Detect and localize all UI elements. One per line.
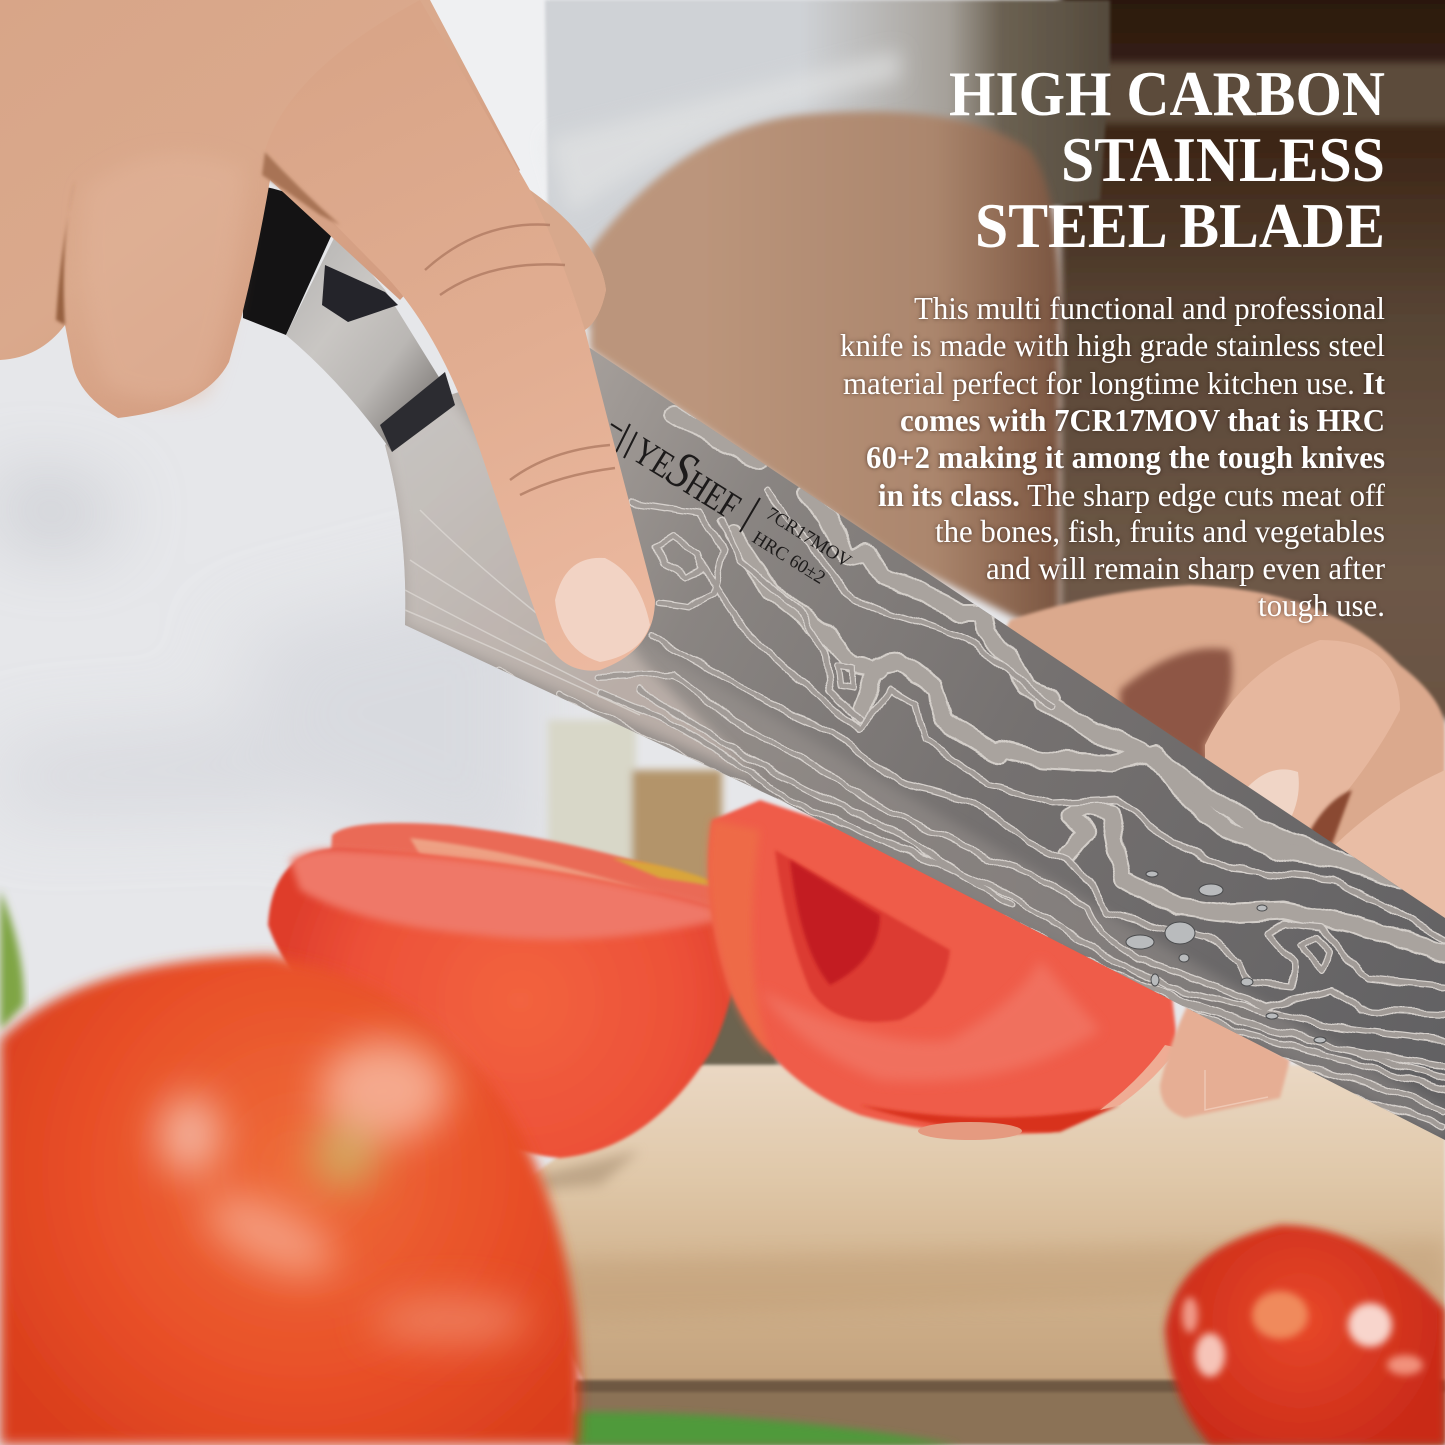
fist bbox=[0, 0, 520, 418]
bolster top reflection bbox=[322, 265, 398, 322]
finger side shadow bbox=[530, 190, 606, 330]
background: shirt sleeve bbox=[545, 0, 1110, 330]
body text: in its class. The sharp edge cuts meat off bbox=[878, 478, 1385, 513]
body text: comes with 7CR17MOV that is HRC bbox=[900, 403, 1385, 438]
herb strip at bottom bbox=[570, 1412, 960, 1445]
body text: and will remain sharp even after bbox=[986, 551, 1385, 586]
left green leaf bbox=[0, 890, 24, 1030]
background: apron shadows bbox=[0, 480, 540, 900]
foreground tomato: large bbox=[0, 955, 580, 1445]
palm bbox=[1000, 585, 1445, 925]
damascus pattern bbox=[500, 413, 1445, 1125]
crease between fingers bbox=[56, 180, 75, 325]
water droplets bbox=[1126, 871, 1326, 1043]
seed cavity bbox=[775, 850, 950, 1022]
tomato half: under blade bbox=[709, 800, 1178, 1140]
outer skin edge bbox=[709, 820, 770, 1055]
finger gap bbox=[1305, 790, 1352, 850]
background: sleeve highlight band bbox=[548, 50, 900, 215]
tomato half: left bbox=[268, 823, 745, 1158]
cutting board bbox=[500, 1065, 1445, 1445]
index finger bbox=[265, 0, 655, 671]
palm crevice bbox=[1120, 648, 1232, 770]
body text bbox=[840, 291, 1385, 623]
large tomato highlights bbox=[158, 1040, 530, 1344]
back slice bbox=[330, 823, 745, 930]
handle bbox=[243, 186, 337, 335]
cut rim bbox=[290, 849, 742, 940]
flesh bbox=[709, 800, 1178, 1134]
fingernail bbox=[1245, 769, 1299, 825]
foreground tomato: small bbox=[1165, 1225, 1445, 1445]
bolster bbox=[286, 232, 450, 452]
blade lower reflection bbox=[641, 650, 1445, 1138]
knife bbox=[243, 186, 1445, 1140]
body text: This multi functional and professional bbox=[914, 291, 1385, 326]
background: white shirt strip bbox=[420, 0, 550, 230]
body text: tough use. bbox=[1258, 588, 1385, 623]
juice drop bbox=[918, 1122, 1022, 1140]
heading: HIGH CARBON bbox=[949, 59, 1385, 129]
bottom skin bbox=[860, 1105, 1120, 1132]
blade logo mark bbox=[611, 424, 637, 458]
hand valley shadow bbox=[262, 152, 340, 225]
lower finger bbox=[1330, 770, 1445, 925]
finger bbox=[1205, 640, 1400, 840]
blade logo: YESHEF: YESHEF bbox=[624, 417, 756, 531]
body text: 60+2 making it among the tough knives bbox=[866, 440, 1385, 475]
right supporting hand bbox=[1000, 585, 1445, 1118]
main body bbox=[268, 848, 742, 1158]
body text: the bones, fish, fruits and vegetables bbox=[935, 514, 1385, 549]
heading bbox=[949, 59, 1385, 261]
peach rim bbox=[1100, 1045, 1178, 1110]
knuckle creases bbox=[425, 225, 615, 495]
heading: STEEL BLADE bbox=[975, 191, 1385, 261]
back slice seeds bbox=[410, 838, 660, 895]
body text: material perfect for longtime kitchen use. It bbox=[843, 366, 1385, 401]
body text: knife is made with high grade stainless steel bbox=[840, 328, 1385, 363]
thumb under blade bbox=[1160, 1000, 1290, 1118]
heel brushed steel bbox=[385, 395, 760, 780]
blade hardness: HRC 60±2 bbox=[748, 527, 829, 589]
blade steel grade: 7CR17MOV bbox=[762, 503, 855, 572]
left hand bbox=[0, 0, 655, 671]
bolster lower reflection bbox=[380, 372, 455, 452]
background: forearm bbox=[590, 112, 1061, 640]
pale flesh streaks bbox=[760, 960, 1100, 1081]
background: dark kitchen at right bbox=[1060, 0, 1445, 720]
heel brush lines bbox=[405, 510, 640, 715]
heading: STAINLESS bbox=[1061, 125, 1385, 195]
fist highlight bbox=[82, 154, 245, 401]
fingernail bbox=[555, 558, 650, 662]
blade logo divider bbox=[740, 498, 760, 532]
knife blade bbox=[385, 348, 1445, 1140]
background: counter behind the tomato bbox=[548, 720, 780, 1070]
background: pale band in kitchen bbox=[1100, 62, 1445, 124]
